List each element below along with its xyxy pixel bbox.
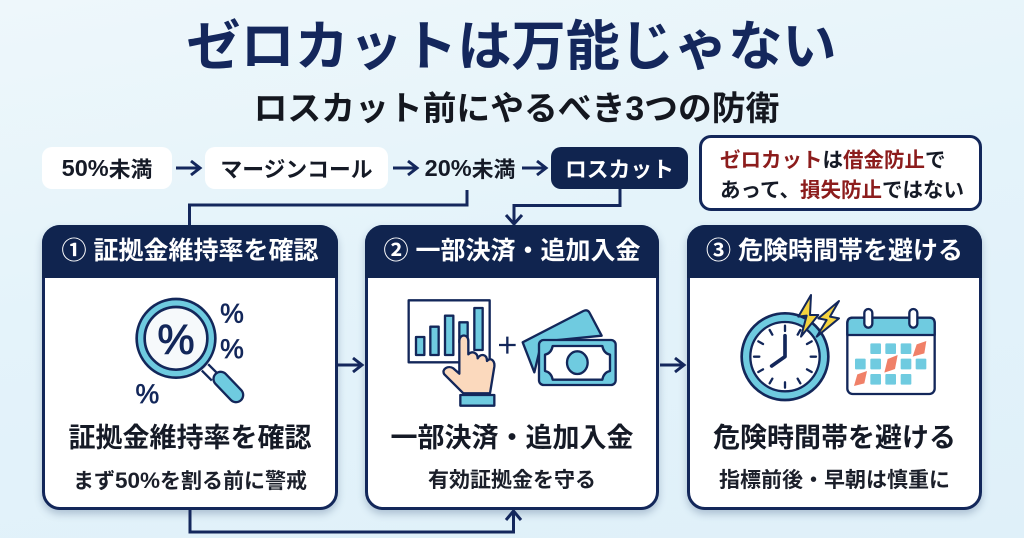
icon: magnifying glass with percent signs: % (220, 334, 244, 364)
card 3 title: 危険時間帯を避ける (713, 423, 956, 453)
icon: magnifying glass with percent signs: % (220, 299, 244, 329)
card 3 subtext: 指標前後・早朝は慎重に (719, 469, 950, 492)
subtitle: ロスカット前にやるべき3つの防衛 (254, 90, 779, 128)
arrow: step 1 to step 2 (176, 160, 202, 176)
flow step: 20%未満: 20% (425, 154, 472, 180)
flow step: マージンコール (205, 147, 388, 189)
panel: card 3 (687, 225, 982, 510)
card 2 header: ② 一部決済・追加入金 (384, 237, 640, 265)
callout line 1: ゼロカットは借金防止で (720, 149, 946, 172)
icon: magnifying glass with percent signs (135, 298, 244, 409)
card 3 header (687, 225, 982, 278)
arrow: card 1 to card 2 (338, 356, 364, 374)
panel: card 1 (42, 225, 338, 510)
flow step: 50%未満: 未満 (109, 156, 152, 182)
connector: ロスカット to card 2 (505, 189, 622, 225)
arrow: card 2 to card 3 (660, 356, 686, 374)
connector: 20%未満 to card 1 (188, 190, 468, 225)
card 2 subtext: 有効証拠金を守る (428, 469, 596, 492)
flow step: 50%未満: 50% (62, 154, 109, 180)
icon: magnifying glass with percent signs: % (157, 316, 195, 363)
flow step: ロスカット: ロスカット (565, 156, 674, 182)
arrow: step 2 to step 3 (393, 160, 420, 176)
flow step: 20%未満: 未満 (472, 156, 515, 182)
title: ゼロカットは万能じゃない (186, 17, 837, 77)
card 2 title: 一部決済・追加入金 (390, 423, 634, 453)
arrow: step 3 to step 4 (522, 160, 548, 176)
connector: card 1 to card 2 along bottom (188, 510, 522, 534)
flow step: 50%未満 (42, 147, 172, 189)
callout (699, 135, 982, 211)
card 1 header (42, 225, 338, 278)
icon: bar chart, hand, plus and banknotes (408, 299, 617, 407)
icon: magnifying glass with percent signs: % (135, 379, 159, 409)
card 3 header: ③ 危険時間帯を避ける (706, 237, 963, 265)
flow step: マージンコール: マージンコール (220, 156, 373, 182)
callout line 2: あって、損失防止ではない (720, 179, 964, 202)
panel: card 2 (365, 225, 659, 510)
card 2 header (365, 225, 659, 278)
card 1 title: 証拠金維持率を確認 (68, 423, 312, 453)
icon: clock, lightning and calendar (740, 294, 936, 402)
flow step: ロスカット (551, 147, 688, 189)
card 1 subtext: まず50%を割る前に警戒 (73, 468, 307, 493)
flow step: 20%未満 (425, 154, 515, 182)
card 1 header: ① 証拠金維持率を確認 (62, 237, 318, 265)
